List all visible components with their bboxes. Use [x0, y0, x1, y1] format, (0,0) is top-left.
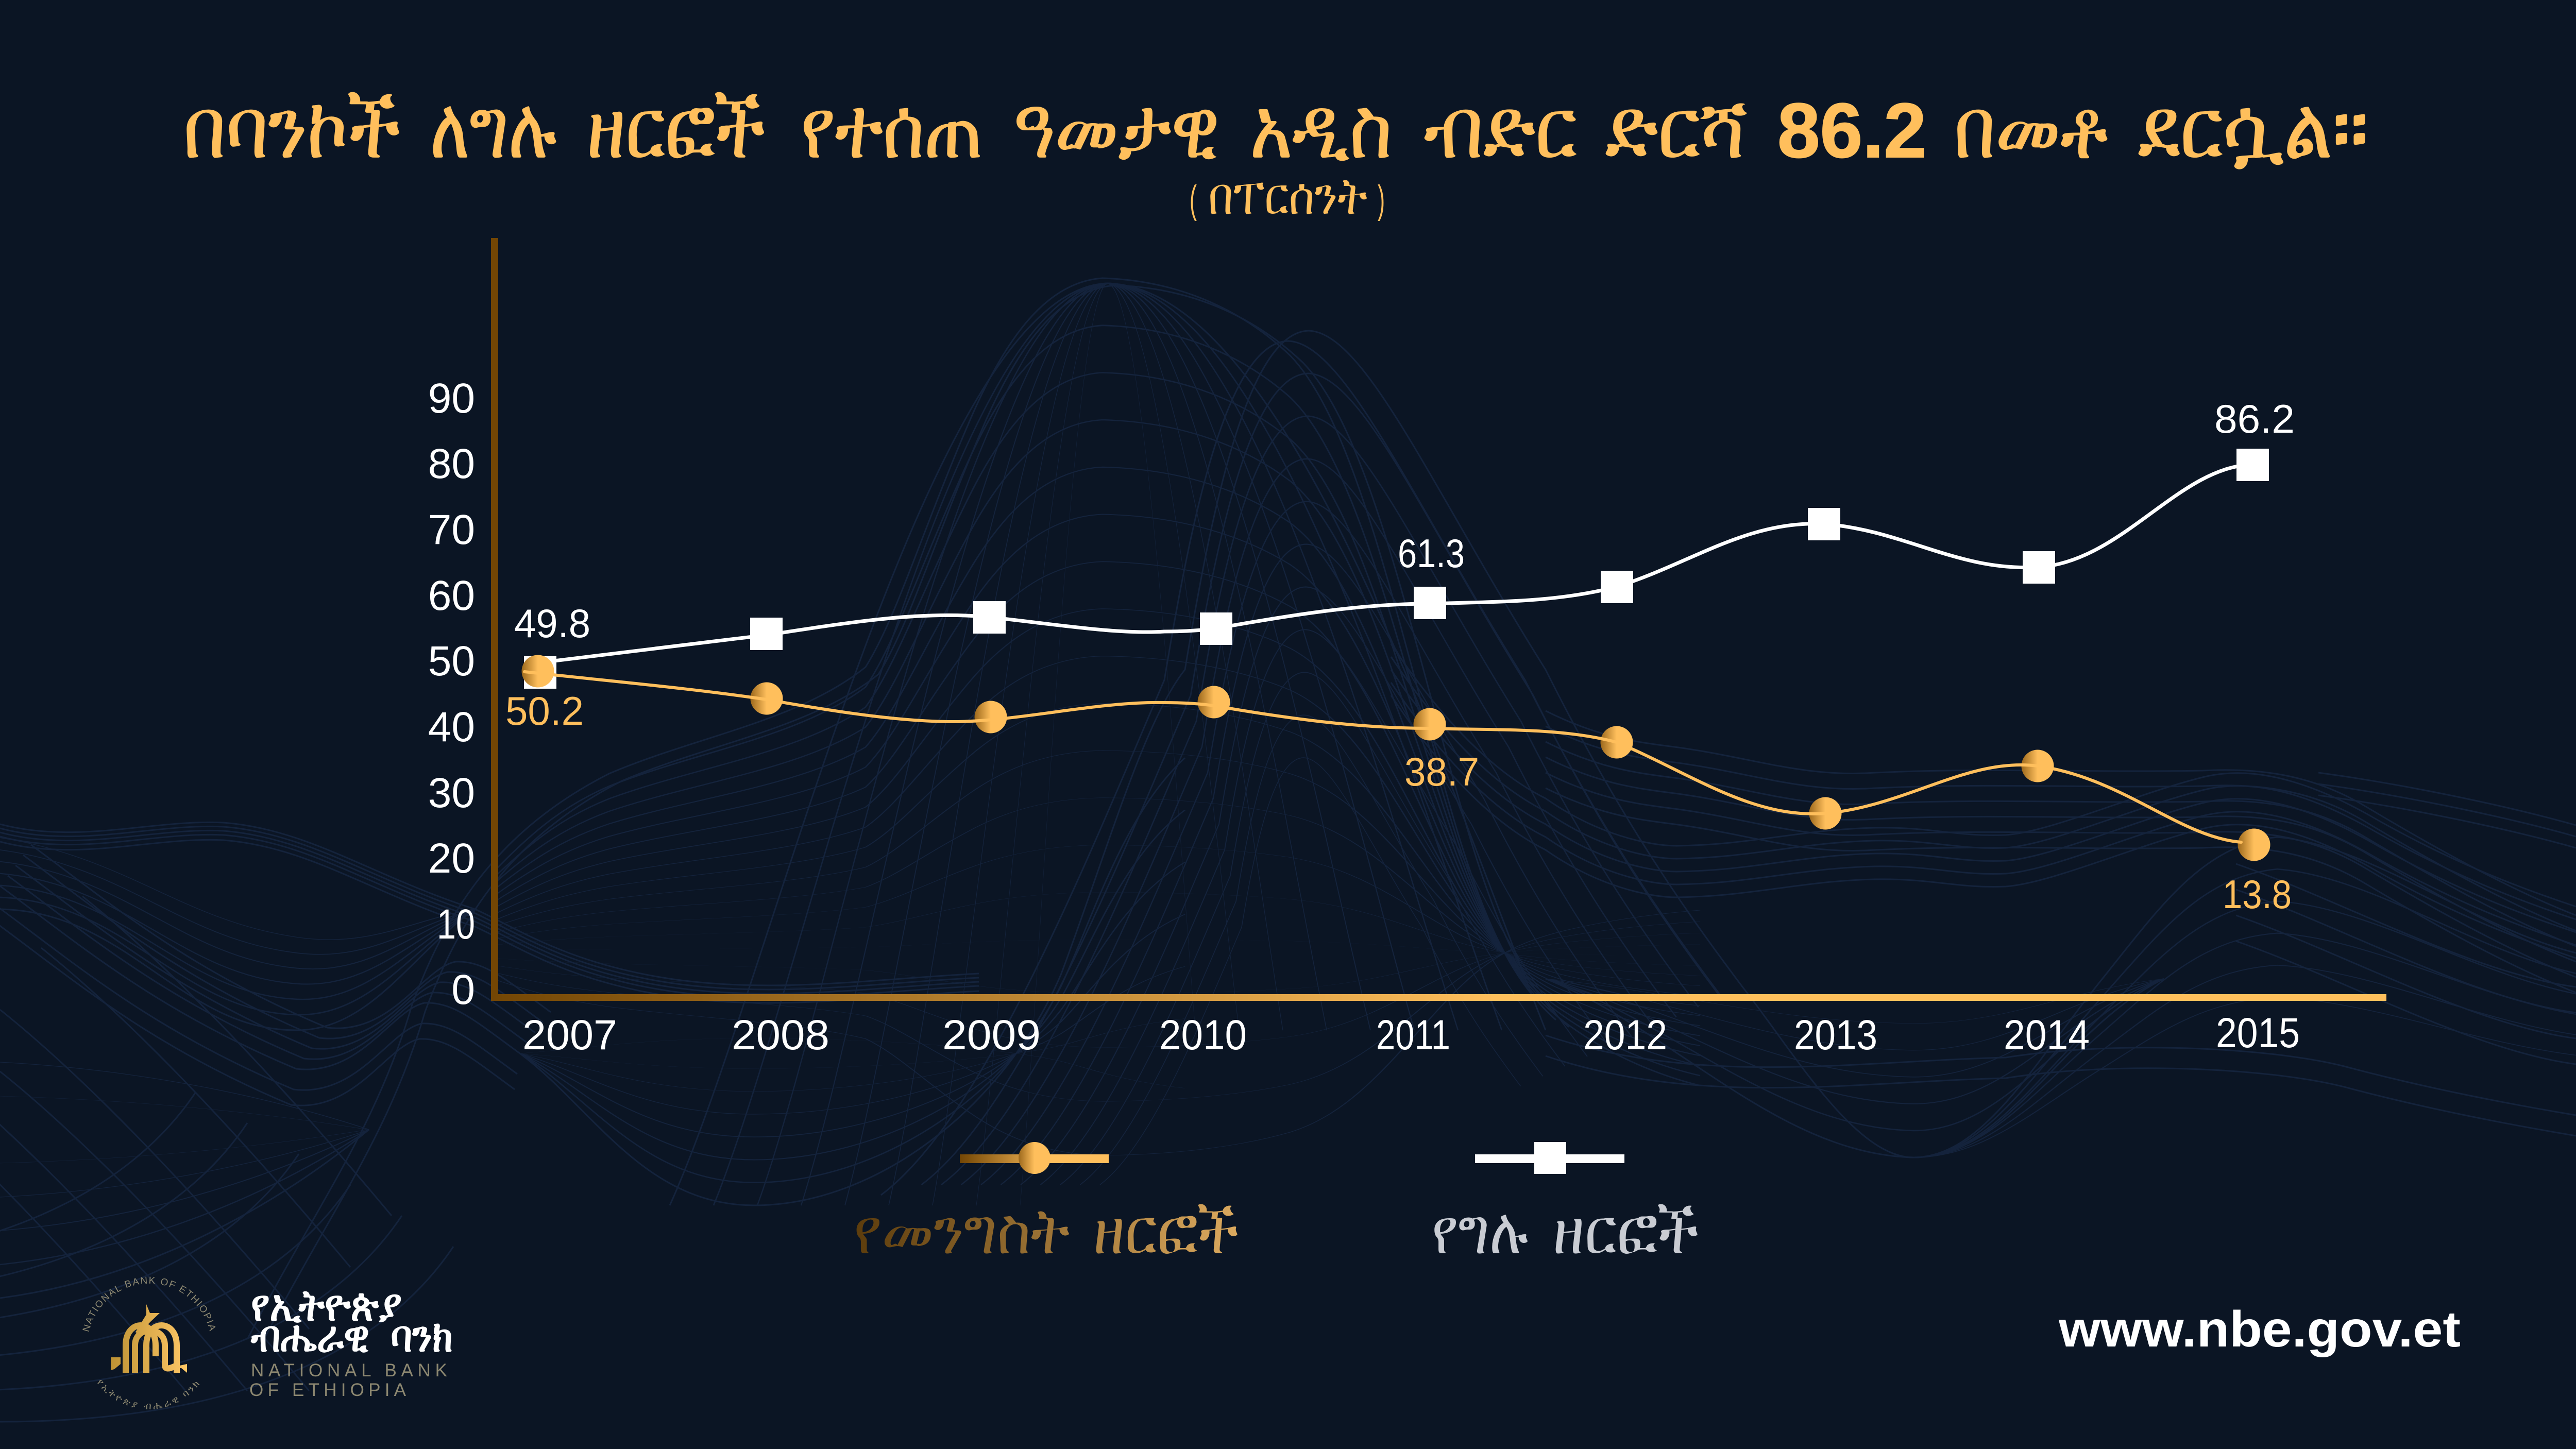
data labels: 50.2: [505, 688, 584, 734]
ring text top: NATIONAL BANK OF ETHIOPIA: [82, 1276, 215, 1332]
title word 9: በመቶ: [1954, 82, 2108, 175]
English name line 1: NATIONAL BANK: [251, 1360, 447, 1380]
title figure: 86.2: [1777, 87, 1926, 174]
emblem: [111, 1304, 187, 1373]
y axis labels: 80: [428, 440, 475, 487]
data labels: [505, 396, 2295, 917]
x axis labels: 2009: [942, 1012, 1041, 1059]
y axis labels: 30: [428, 770, 475, 816]
legend label word 1: የግሉ: [1432, 1196, 1528, 1267]
title word 3: ዘርፎች: [587, 82, 765, 175]
legend label word 2: ዘርፎች: [1553, 1196, 1699, 1267]
private line: [524, 465, 2252, 664]
x axis labels: 2015: [2216, 1010, 2300, 1056]
x axis labels: 2007: [522, 1012, 617, 1059]
axes: [491, 238, 2386, 1001]
x axis labels: 2011: [1376, 1012, 1450, 1059]
legend label word 1: የመንግስት: [854, 1196, 1070, 1267]
Amharic name line 2 word 2: ባንክ: [391, 1312, 453, 1360]
Amharic name line 1: የኢትዮጵያ: [251, 1281, 402, 1329]
y axis labels: [428, 375, 475, 1013]
data labels: 38.7: [1404, 749, 1479, 794]
subtitle word: በፐርሰንት: [1208, 167, 1367, 225]
private sector series: [524, 449, 2269, 689]
title: [183, 82, 2368, 175]
government sector series: [521, 655, 2270, 861]
data labels: 49.8: [514, 601, 590, 646]
y axis labels: 90: [428, 375, 475, 422]
title word 1: በባንኮች: [183, 82, 400, 175]
background wave mesh: [0, 278, 2576, 1422]
government markers: [521, 655, 2270, 861]
title word 8: ድርሻ: [1605, 82, 1747, 175]
government line: [524, 672, 2241, 842]
title word 5: ዓመታዊ: [1013, 82, 1219, 175]
y axis labels: 40: [428, 704, 475, 751]
website url: www.nbe.gov.et: [2058, 1301, 2461, 1357]
x axis labels: 2013: [1794, 1012, 1877, 1059]
x axis line: [491, 994, 2386, 1001]
legend label word 2: ዘርፎች: [1093, 1196, 1239, 1267]
closing parenthesis: ): [1378, 178, 1385, 221]
logo: National Bank of Ethiopia: [82, 1276, 453, 1409]
y axis labels: 20: [428, 835, 475, 882]
x axis labels: [522, 1010, 2300, 1059]
title word 7: ብድር: [1424, 82, 1577, 175]
subtitle: [1190, 167, 1385, 225]
y axis labels: 60: [428, 572, 475, 619]
y axis labels: 10: [437, 901, 475, 948]
y axis labels: 0: [451, 966, 475, 1013]
data labels: 86.2: [2214, 396, 2295, 441]
x axis labels: 2014: [2004, 1012, 2090, 1059]
title word 2: ለግሉ: [430, 82, 556, 175]
y axis labels: 50: [428, 638, 475, 685]
data labels: 13.8: [2223, 872, 2292, 917]
x axis labels: 2010: [1159, 1012, 1247, 1059]
legend square: [1534, 1142, 1566, 1174]
ring text bottom: የኢትዮጵያ ብሔራዊ ባንክ: [97, 1380, 200, 1409]
title word 4: የተሰጠ: [801, 82, 983, 175]
Amharic name line 2 word 1: ብሔራዊ: [250, 1312, 369, 1360]
legend: private: [1432, 1142, 1699, 1267]
title word 6: አዲስ: [1250, 82, 1392, 175]
opening parenthesis: (: [1190, 178, 1197, 221]
legend line: [1475, 1154, 1624, 1163]
x axis labels: 2008: [732, 1012, 829, 1059]
x axis labels: 2012: [1583, 1012, 1667, 1059]
title word 10: ደርሷል።: [2138, 82, 2368, 175]
legend dot: [1019, 1142, 1050, 1174]
legend line: [960, 1154, 1109, 1163]
legend: government: [854, 1142, 1239, 1267]
y axis labels: 70: [428, 506, 475, 553]
private markers: [524, 449, 2269, 689]
y axis line: [491, 238, 498, 1001]
English name line 2: OF ETHIOPIA: [249, 1380, 406, 1400]
data labels: 61.3: [1398, 531, 1465, 576]
